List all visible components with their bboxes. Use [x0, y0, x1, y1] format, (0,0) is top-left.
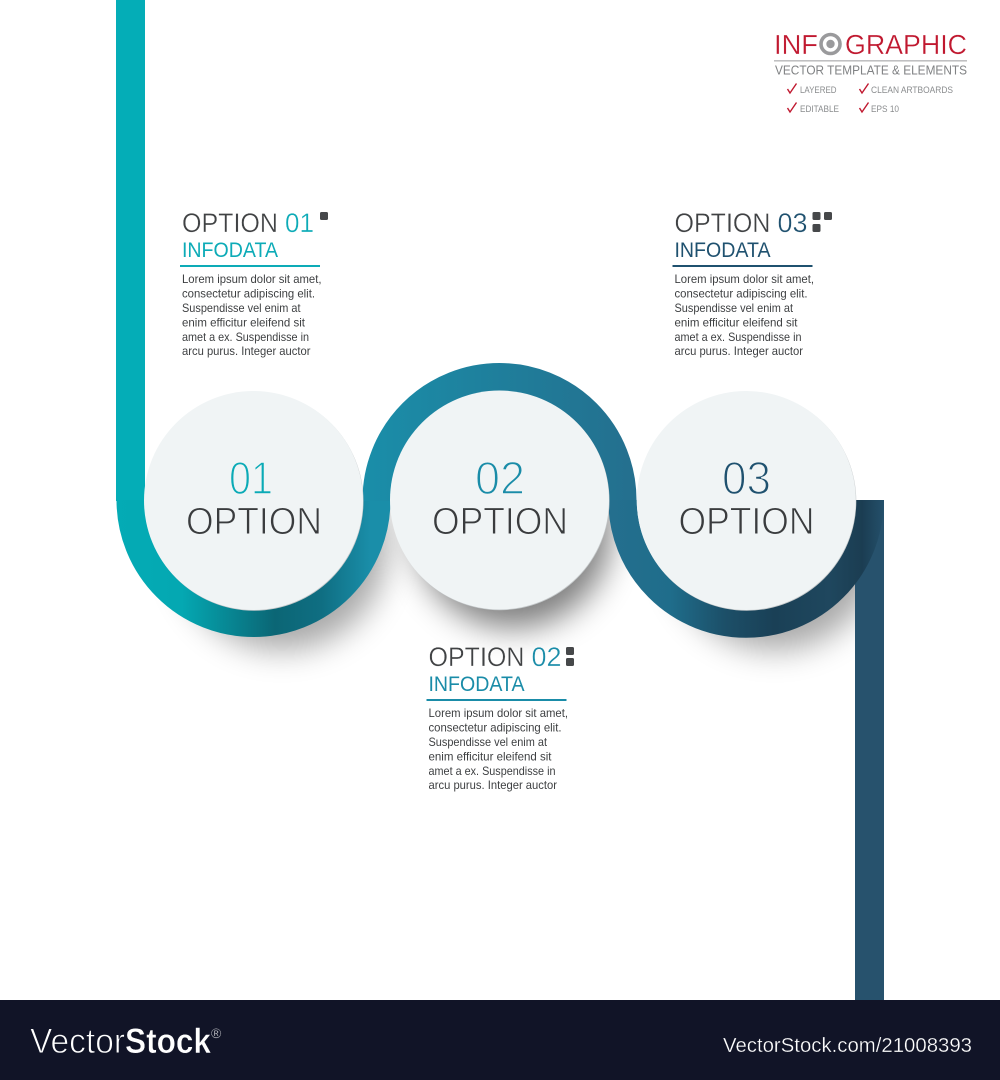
footer: VectorStock logo: ®	[211, 1025, 222, 1041]
panel: option 01 text: enim efficitur eleifend sit	[182, 316, 306, 330]
logo: infographic vector template: EDITABLE	[800, 103, 839, 114]
panel: option 03 text: enim efficitur eleifend sit	[674, 316, 798, 330]
panel: option 02 text: 02	[532, 642, 562, 672]
panel: option 03 text: arcu purus. Integer auctor	[674, 345, 803, 358]
panel: option 01 text: 01	[285, 208, 314, 238]
panel: option 02 text: Suspendisse vel enim at	[428, 736, 548, 749]
logo: infographic vector template: CLEAN ARTBOARDS	[871, 84, 953, 95]
panel: option 02 text: Lorem ipsum dolor sit amet,	[428, 707, 568, 720]
panel: option 02 text: consectetur adipiscing elit.	[428, 722, 562, 734]
logo: infographic vector template	[774, 29, 967, 114]
panel: option 01 text: OPTION	[182, 208, 278, 238]
circle 1: 01	[229, 452, 273, 504]
footer: VectorStock logo	[30, 1022, 222, 1061]
panel: option 03 text: amet a ex. Suspendisse in	[674, 331, 802, 344]
circle 1: OPTION	[186, 501, 322, 543]
panel: option 01 text: INFODATA	[182, 239, 278, 262]
panel: option 02 text: enim efficitur eleifend sit	[428, 750, 552, 764]
circle 3: 03	[722, 452, 771, 504]
panel: option 02 text: INFODATA	[428, 673, 524, 696]
panel: option 01 text: arcu purus. Integer auctor	[182, 345, 311, 358]
footer bar	[0, 1000, 1000, 1080]
panel: option 03 text: INFODATA	[674, 239, 770, 262]
circle 2: 02	[475, 452, 525, 504]
logo: infographic vector template: INF	[774, 29, 818, 60]
panel: option 02 text: amet a ex. Suspendisse in	[428, 765, 556, 778]
circle 3: OPTION	[678, 501, 814, 543]
panel: option 03 text: 03	[778, 208, 808, 238]
panel: option 01 text: Lorem ipsum dolor sit amet,	[182, 273, 322, 286]
panel: option 02 text: arcu purus. Integer auctor	[428, 779, 557, 792]
panel: option 03 text: Suspendisse vel enim at	[674, 302, 794, 315]
logo: infographic vector template: VECTOR TEMPLATE & ELEMENTS	[775, 64, 967, 78]
ribbon: arc over circle 2	[376, 377, 622, 501]
logo: infographic vector template: GRAPHIC	[845, 29, 967, 60]
logo: infographic vector template: LAYERED	[800, 84, 837, 95]
panel: option 02 text: OPTION	[428, 642, 524, 672]
panel: option 03 text	[672, 208, 832, 358]
footer: VectorStock logo: Vector	[30, 1022, 125, 1061]
panel: option 01 text: Suspendisse vel enim at	[182, 302, 301, 315]
ribbon: arc under circle 1	[130, 500, 376, 623]
panel: option 01 text: amet a ex. Suspendisse in	[182, 331, 309, 344]
ribbon: arc under circle 3	[622, 500, 870, 624]
ribbon: teal top-left vertical	[116, 0, 145, 501]
ribbon: dark bottom-right vertical	[855, 500, 884, 1000]
panel: option 03 text: OPTION	[674, 208, 770, 238]
panel: option 01 text	[180, 208, 328, 358]
logo: infographic vector template: EPS 10	[871, 103, 899, 114]
panel: option 01 text: consectetur adipiscing elit.	[182, 288, 315, 300]
footer: image id: VectorStock.com/21008393	[723, 1035, 972, 1057]
circle 2	[390, 390, 610, 610]
panel: option 02 text	[426, 642, 574, 792]
circle 2: OPTION	[432, 501, 568, 543]
ribbon shadows	[182, 508, 855, 668]
circle 3	[637, 391, 856, 611]
footer: VectorStock logo: Stock	[125, 1022, 211, 1061]
panel: option 03 text: consectetur adipiscing elit.	[674, 288, 808, 300]
panel: option 03 text: Lorem ipsum dolor sit amet,	[674, 273, 814, 286]
circle 1	[144, 391, 364, 611]
